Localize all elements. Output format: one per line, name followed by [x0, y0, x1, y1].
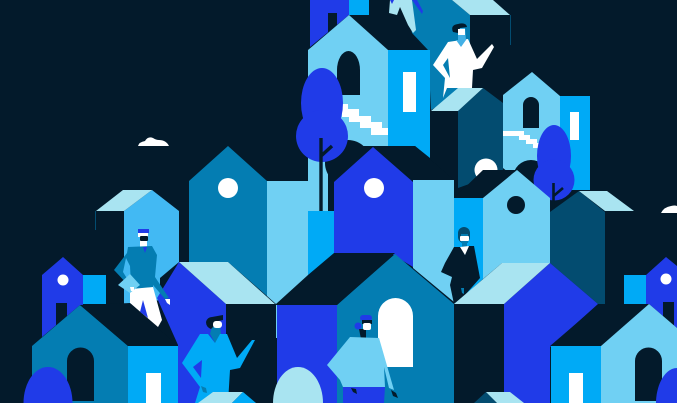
- small pale roof bottom centre right: [474, 392, 524, 403]
- person: legs at top: [389, 0, 423, 33]
- person: sky blue with mask: [182, 315, 255, 403]
- house: central bottom with arched white door: [276, 253, 454, 403]
- person: light outfit with blue cap: [327, 315, 398, 403]
- house: small left blue: [42, 257, 106, 337]
- house: central blue with round window: [334, 147, 454, 302]
- house: top light with stairs: [308, 15, 430, 158]
- house: top blue: [310, 0, 369, 47]
- person: white outfit with mask: [433, 23, 494, 98]
- person: teal sweater, white trousers: [114, 229, 170, 327]
- tree: left blue: [296, 68, 348, 211]
- house: right dark teal with pale roof: [550, 191, 634, 304]
- person: dark suit with mask: [441, 227, 480, 304]
- cloud left: [138, 137, 169, 146]
- teal wall and pale roof at top: [405, 0, 511, 110]
- dark bush behind central house: [325, 140, 454, 186]
- house: centre left teal with round window: [189, 146, 308, 304]
- small pale roof bottom: [198, 392, 256, 403]
- house: sky side wall and dark roof: [454, 170, 517, 304]
- house: right light with round window: [483, 170, 550, 279]
- house: bottom left teal with arched door: [32, 303, 178, 403]
- house: blue with pale roof: [157, 262, 275, 403]
- bush: bottom centre pale: [273, 367, 323, 403]
- tree: right blue: [534, 125, 574, 210]
- bush: bottom left blue: [24, 367, 72, 403]
- house: right blue with pale roof: [454, 263, 598, 403]
- cloud right: [661, 206, 677, 213]
- bush: bottom right blue: [656, 368, 677, 403]
- house: small right blue: [624, 257, 677, 328]
- house: left sky with pale roof: [95, 190, 179, 304]
- house: upper right light with stairs: [503, 72, 590, 196]
- strip behind left tree: [308, 158, 334, 275]
- house: middle dark teal with pale roof: [431, 88, 503, 188]
- house: bottom right light with arched door: [550, 304, 677, 403]
